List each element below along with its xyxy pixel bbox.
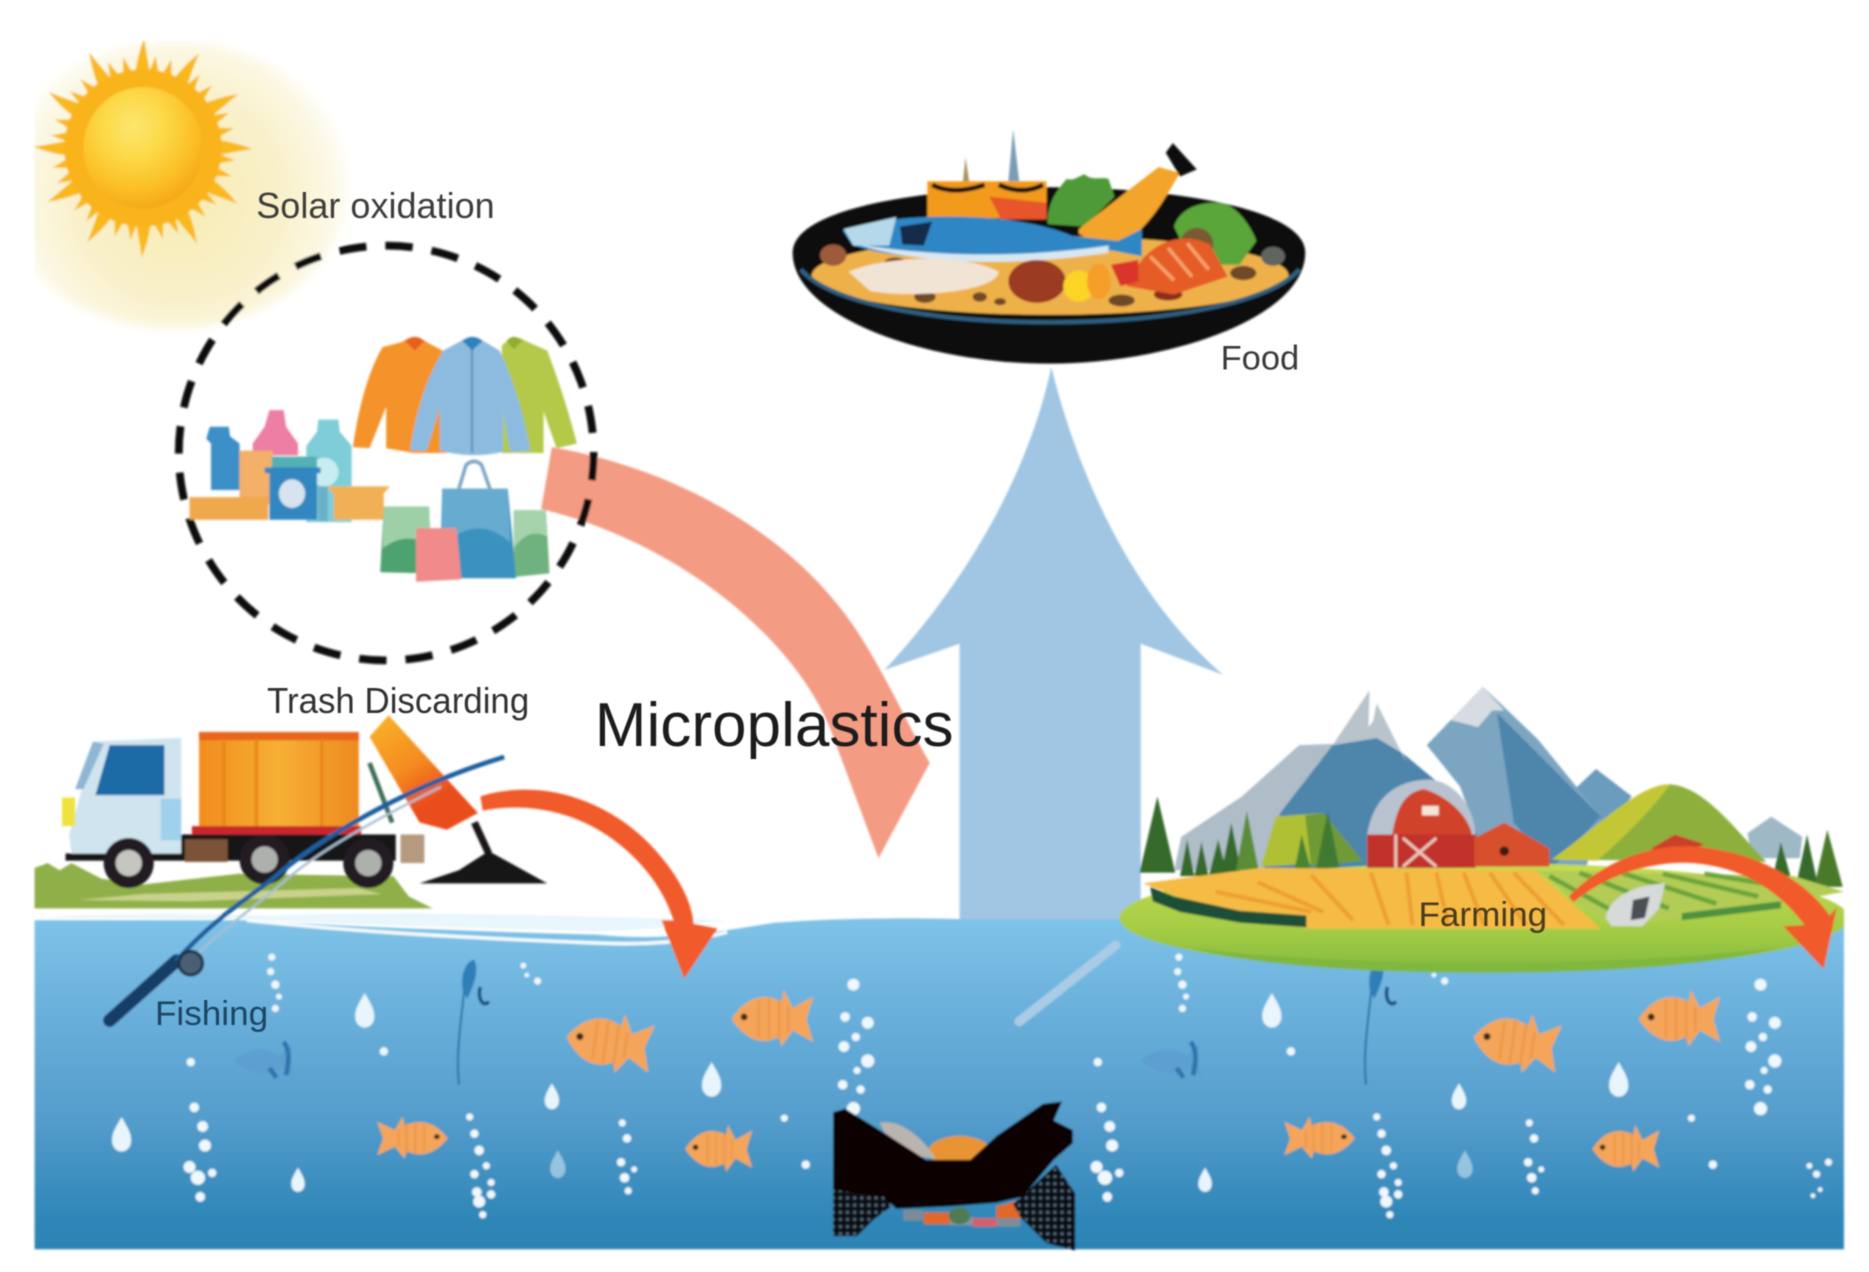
icon: shelf boxes left (190, 497, 268, 520)
tipping bin (370, 715, 478, 830)
island base (1119, 863, 1849, 973)
grey bucket (400, 834, 424, 863)
net dotted mesh (833, 1162, 892, 1236)
catch at bottom (904, 1200, 1023, 1227)
orange arrow to water (480, 790, 718, 979)
lemon (1063, 271, 1094, 302)
group: bottles and boxes (190, 410, 390, 522)
truck cargo box (199, 732, 359, 833)
icon: sun (0, 38, 349, 328)
group: clothing (353, 337, 577, 455)
group: shopping bags (380, 461, 549, 582)
garbage pile (420, 851, 547, 883)
icon: pink bag (416, 528, 461, 582)
sun halo (0, 42, 349, 328)
label: farming: Farming (1418, 896, 1547, 934)
lettuce 1 (1048, 174, 1114, 227)
fishing net with catch (833, 1101, 1075, 1250)
truck headlight (62, 798, 75, 826)
label: fishing: Fishing (155, 995, 268, 1033)
icon: shelf box right (325, 486, 390, 520)
ghost fishing rod (1019, 945, 1116, 1022)
food plate (793, 129, 1305, 364)
crop field orange (1143, 868, 1601, 929)
icon: blue shirt (410, 337, 530, 455)
falling dirt (474, 823, 489, 854)
right hedge (1682, 901, 1781, 920)
wrap with black tip (1079, 143, 1197, 248)
shrimp pile (1126, 239, 1228, 295)
white fish slice (849, 259, 999, 294)
barn large (1367, 780, 1476, 868)
orange box items (927, 129, 1047, 219)
heading: microplastics: Microplastics (595, 691, 954, 760)
green hills (1261, 784, 1766, 867)
blue fish (843, 217, 1142, 262)
icon: blue bag (440, 489, 516, 578)
net solid black (833, 1101, 1073, 1209)
grass ground (35, 863, 433, 908)
truck wheels (104, 834, 393, 888)
sun disc (83, 87, 203, 209)
cow (1606, 883, 1665, 926)
bubbles: far right (1806, 1159, 1832, 1198)
water life: left (112, 954, 874, 1218)
pink microplastics arrow (541, 447, 930, 858)
label: solar oxidation: Solar oxidation (256, 186, 495, 226)
big blue arrow to food (884, 367, 1223, 930)
dashed circle (179, 246, 594, 660)
red barn far (1650, 834, 1704, 851)
sun rays (33, 38, 253, 258)
icon: tall orange box (240, 451, 273, 504)
lift arm (370, 763, 392, 823)
water life: right (1019, 954, 1781, 1218)
icon: green bag left (380, 507, 431, 573)
icon: green shirt (502, 338, 577, 453)
caught fish: speckled (880, 1122, 936, 1159)
icon: teal bottle (306, 420, 352, 522)
plate food base (812, 236, 1289, 315)
truck (35, 715, 547, 908)
lettuce 2 (1174, 203, 1256, 265)
truck chassis (66, 834, 396, 861)
small food dots (820, 244, 1285, 306)
fishing rod (110, 757, 504, 1020)
label: trash discarding: Trash Discarding (267, 681, 529, 721)
icon: pink bottle (253, 410, 298, 455)
snow caps (1333, 690, 1407, 763)
label: food: Food (1221, 340, 1299, 378)
icon: blue bottle (206, 427, 240, 490)
caught fish: top (929, 1136, 991, 1167)
icon: blue container (265, 457, 321, 520)
farm island (1119, 687, 1849, 973)
water body (35, 914, 1844, 1249)
truck cab (69, 738, 181, 854)
hedge row (1150, 887, 1306, 927)
pine trees (1140, 796, 1843, 887)
plate bowl (793, 187, 1305, 364)
icon: green bag back right (514, 510, 549, 577)
green crop rows (1535, 870, 1844, 926)
barn small (1474, 823, 1550, 867)
meat (1008, 260, 1066, 303)
mountains (1174, 687, 1802, 870)
icon: orange shirt (353, 337, 447, 453)
orange arrow on farm (1569, 846, 1837, 969)
